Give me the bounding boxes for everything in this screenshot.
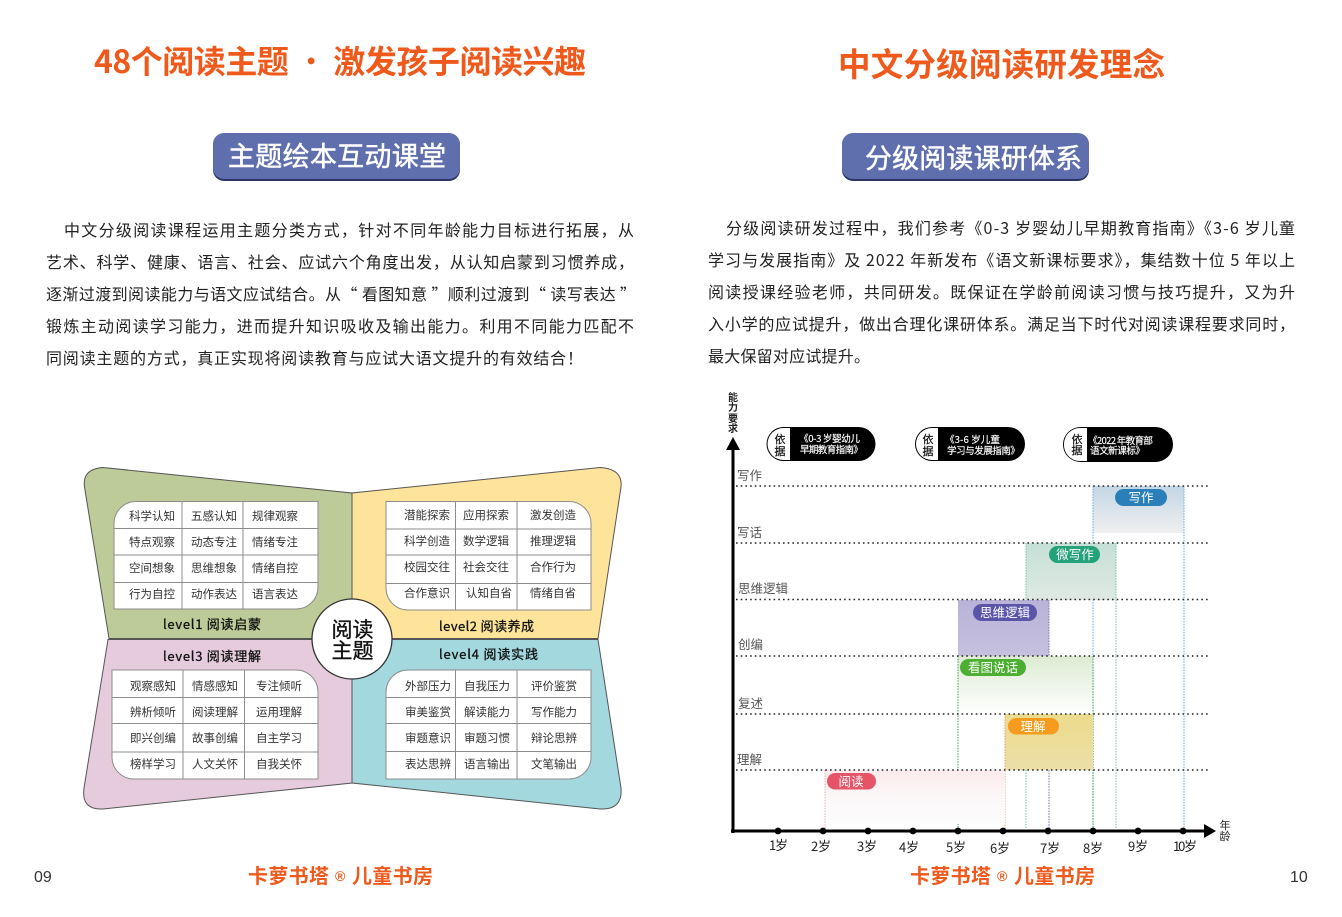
panel: level 1: 科学认知 — [129, 508, 175, 524]
pill: 写作: 写作 — [1128, 487, 1154, 506]
right footer brand — [910, 860, 1095, 889]
panel: level 4: 外部压力 — [405, 678, 451, 694]
panel: level 4: 自我压力 — [464, 678, 510, 694]
panel: level 4: 辩论思辨 — [531, 730, 577, 746]
panel: level 2: 认知自省 — [466, 585, 512, 601]
reference tag: 0-3: 早期教育指南》 — [800, 442, 863, 456]
x axis title: 年 — [1220, 817, 1230, 833]
left footer brand: 卡萝书塔 — [248, 860, 329, 889]
x axis title — [1220, 817, 1230, 844]
right page title: 中文分级阅读研发理念 — [838, 39, 1165, 86]
pill: 阅读: 阅读 — [838, 771, 864, 790]
reference tag: 3-6: 据 — [922, 443, 934, 459]
pill: 思维逻辑: 思维逻辑 — [980, 602, 1030, 621]
left footer brand: 儿童书房 — [352, 860, 433, 889]
panel: level 2: 校园交往 — [404, 559, 450, 575]
panel: level 1 — [84, 468, 352, 638]
left footer brand — [248, 860, 433, 889]
panel: level 4: 审题习惯 — [464, 730, 510, 746]
centre circle: 阅读 — [332, 614, 374, 644]
panel: level 1: 语言表达 — [252, 586, 298, 602]
y axis title — [728, 389, 738, 435]
panel: level 4: 语言输出 — [464, 756, 510, 772]
right footer brand: 卡萝书塔 — [910, 860, 991, 889]
panel: level 2 — [352, 468, 621, 638]
y axis labels: 写作 — [737, 465, 763, 484]
x axis labels: 3 岁 — [857, 836, 877, 855]
x axis labels: 4 岁 — [899, 837, 919, 856]
panel: level 1: 规律观察 — [252, 508, 298, 524]
panel: level 2: 合作意识 — [404, 585, 450, 601]
left footer brand: ® — [335, 868, 346, 884]
panel: level 4: level4 阅读实践 — [439, 644, 538, 663]
panel: level 4: 表达思辨 — [405, 756, 451, 772]
left body text: 锻炼主动阅读学习能力，进而提升知识吸收及输出能力。利用不同能力匹配不 — [46, 313, 634, 337]
panel: level 1: 动态专注 — [191, 534, 237, 550]
y axis title: 力 — [728, 399, 738, 414]
panel: level 1: 思维想象 — [191, 560, 237, 576]
right body text: 学习与发展指南》及 2022 年新发布《语文新课标要求》，集结数十位 5 年以上 — [708, 247, 1295, 271]
panel: level 2: 科学创造 — [404, 533, 450, 549]
pill: 理解 — [1008, 716, 1059, 735]
y axis labels — [737, 465, 788, 768]
panel: level 4: 文笔输出 — [531, 756, 577, 772]
pill: 看图说话: 看图说话 — [968, 657, 1018, 676]
panel: level 3: 辨析倾听 — [130, 704, 176, 720]
right body text: 最大保留对应试提升。 — [708, 343, 870, 367]
panel: level 1: 行为自控 — [129, 586, 175, 602]
panel: level 2: 推理逻辑 — [530, 533, 576, 549]
x axis labels: 2 岁 — [811, 836, 831, 855]
panel: level 3: 即兴创编 — [130, 730, 176, 746]
panel: level 3: 专注倾听 — [256, 678, 302, 694]
panel: level 3: 观察感知 — [130, 678, 176, 694]
x axis labels: 1 岁 — [769, 835, 788, 854]
panel: level 2: level2 阅读养成 — [439, 616, 534, 635]
panel: level 3: 故事创编 — [192, 730, 238, 746]
panel: level 2: 社会交往 — [463, 559, 509, 575]
panel: level 1: 五感认知 — [191, 508, 237, 524]
panel: level 4: 审美鉴赏 — [405, 704, 451, 720]
reference tag: 2022: 《2022 年教育部 — [1088, 433, 1153, 447]
reading themes diagram — [84, 468, 621, 809]
x axis labels: 6 岁 — [990, 838, 1010, 857]
y axis labels: 复述 — [738, 693, 764, 712]
right body text — [708, 215, 1295, 367]
right body text: 阅读授课经验老师，共同研发。既保证在学龄前阅读习惯与技巧提升，又为升 — [708, 279, 1295, 303]
right body text: 入小学的应试提升，做出合理化课研体系。满足当下时代对阅读课程要求同时， — [708, 311, 1295, 335]
bar: 思维逻辑 — [958, 600, 1049, 829]
reference tag: 2022: 据 — [1072, 442, 1082, 458]
right heading badge: 分级阅读课研体系 — [865, 137, 1082, 176]
reference tag: 3-6 — [915, 427, 1025, 461]
growth chart — [726, 389, 1230, 857]
left page title: 48个阅读主题 · 激发孩子阅读兴趣 — [94, 37, 586, 83]
right footer brand: 儿童书房 — [1014, 860, 1095, 889]
reference tag: 3-6: 《3-6 岁儿童 — [945, 432, 1000, 446]
x axis labels: 5 岁 — [946, 837, 966, 856]
panel: level 1: 特点观察 — [129, 534, 175, 550]
left page number: 09 — [34, 869, 52, 886]
panel: level 4 — [352, 640, 621, 809]
reference tag: 0-3 — [766, 427, 876, 461]
reference tag: 0-3: 依 — [774, 431, 786, 447]
x axis labels: 9 岁 — [1128, 836, 1148, 855]
panel: level 1: 动作表达 — [191, 586, 237, 602]
panel: level 4: 写作能力 — [531, 704, 577, 720]
panel: level 1: 情绪专注 — [252, 534, 298, 550]
x axis title: 龄 — [1220, 828, 1230, 844]
reference tag: 2022: 语文新课标》 — [1090, 443, 1145, 457]
panel: level 3: 榜样学习 — [130, 756, 176, 772]
y axis title: 求 — [728, 420, 738, 435]
panel: level 1: 空间想象 — [129, 560, 175, 576]
reference tag: 2022: 依 — [1072, 431, 1082, 447]
left body text: 艺术、科学、健康、语言、社会、应试六个角度出发，从认知启蒙到习惯养成， — [46, 249, 634, 273]
panel: level 2: 应用探索 — [463, 507, 509, 523]
reference tag: 0-3: 据 — [774, 443, 786, 459]
left body text — [46, 217, 636, 369]
y axis title: 要 — [728, 410, 738, 425]
reference tag: 2022 — [1063, 427, 1173, 462]
panel: level 4: 解读能力 — [464, 704, 510, 720]
level dotted lines — [736, 486, 1210, 770]
centre circle — [312, 599, 392, 679]
x axis labels: 8 岁 — [1083, 838, 1103, 857]
x axis — [731, 824, 1216, 838]
panel: level 2: 潜能探索 — [404, 507, 450, 523]
right body text: 分级阅读研发过程中，我们参考《0-3 岁婴幼儿早期教育指南》《3-6 岁儿童 — [726, 215, 1295, 239]
bar: 理解 — [1005, 714, 1093, 829]
panel: level 1: 情绪自控 — [252, 560, 298, 576]
panel: level 2: 情绪自省 — [530, 585, 576, 601]
panel: level 4: 评价鉴赏 — [531, 678, 577, 694]
panel: level 3: 自我关怀 — [256, 756, 302, 772]
bar: 微写作 — [1026, 543, 1116, 829]
panel: level 3: 人文关怀 — [192, 756, 238, 772]
x axis labels: 10 岁 — [1173, 836, 1197, 855]
panel: level 3: level3 阅读理解 — [163, 646, 261, 665]
left body text: 中文分级阅读课程运用主题分类方式，针对不同年龄能力目标进行拓展，从 — [64, 217, 634, 241]
pill: 阅读 — [827, 771, 876, 790]
centre circle: 主题 — [332, 635, 374, 665]
panel: level 3: 运用理解 — [256, 704, 302, 720]
x axis labels — [769, 835, 1197, 857]
panel: level 3: 阅读理解 — [192, 704, 238, 720]
panel: level 2: 合作行为 — [530, 559, 576, 575]
x axis labels: 7 岁 — [1040, 838, 1060, 857]
reference tag: 0-3: 《0-3 岁婴幼儿 — [799, 431, 860, 445]
panel: level 2: 数学逻辑 — [463, 533, 509, 549]
panel: level 3: 情感感知 — [192, 678, 238, 694]
bar: 看图说话 — [958, 656, 1093, 829]
pill: 写作 — [1115, 487, 1167, 506]
panel: level 1: level1 阅读启蒙 — [163, 614, 261, 633]
reference tag: 3-6: 学习与发展指南》 — [947, 443, 1020, 457]
reference tag: 3-6: 依 — [922, 431, 934, 447]
y axis labels: 思维逻辑 — [738, 578, 788, 597]
pill: 理解: 理解 — [1020, 716, 1046, 735]
right page number: 10 — [1290, 869, 1308, 886]
y axis labels: 理解 — [737, 749, 762, 768]
bar: 阅读 — [825, 770, 1005, 829]
y axis title: 能 — [728, 389, 738, 404]
panel: level 3: 自主学习 — [256, 730, 302, 746]
left body text: 同阅读主题的方式，真正实现将阅读教育与应试大语文提升的有效结合！ — [46, 345, 583, 369]
pill: 微写作: 微写作 — [1056, 544, 1094, 563]
panel: level 2: 激发创造 — [530, 507, 576, 523]
y axis labels: 写话 — [737, 522, 762, 541]
y axis — [726, 437, 740, 833]
right footer brand: ® — [997, 868, 1008, 884]
panel: level 4: 审题意识 — [405, 730, 451, 746]
panel: level 3 — [84, 640, 352, 809]
left heading badge: 主题绘本互动课堂 — [228, 135, 446, 174]
y axis labels: 创编 — [738, 634, 763, 653]
left body text: 逐渐过渡到阅读能力与语文应试结合。从“ 看图知意 ”顺利过渡到“ 读写表达 ” — [46, 281, 636, 305]
bar: 写作 — [1093, 486, 1184, 829]
